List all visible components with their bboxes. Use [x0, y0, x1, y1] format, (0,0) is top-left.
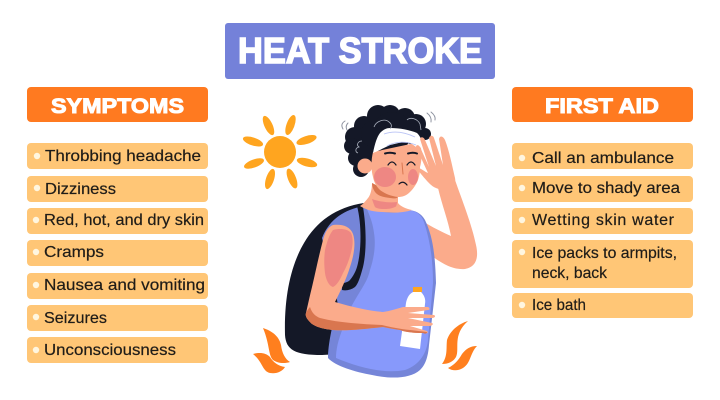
item: throbbing headache: Throbbing headache [45, 148, 201, 165]
raised arm [424, 180, 477, 269]
eyes and brows [385, 153, 417, 185]
heading: first aid [512, 87, 693, 122]
hand on forehead [416, 136, 455, 189]
backpack strap [342, 206, 366, 290]
item: ice bath [512, 293, 693, 318]
item: cramps: Cramps [44, 244, 104, 261]
item: call an ambulance [512, 143, 693, 169]
title [225, 23, 495, 79]
panel: symptoms [27, 87, 208, 363]
panel: first aid [512, 87, 693, 318]
item: nausea and vomiting: Nausea and vomiting [44, 277, 205, 294]
icon: sun [242, 114, 318, 190]
sunburn on upper arm [324, 229, 353, 287]
item: ice bath: Ice bath [532, 297, 586, 314]
item: move to shady area: Move to shady area [532, 180, 680, 197]
heading: symptoms [27, 87, 208, 122]
face [358, 142, 422, 197]
icon: left flames [253, 328, 290, 373]
item: unconsciousness [27, 337, 208, 363]
curl highlights [356, 118, 421, 153]
icon: right flames [442, 321, 477, 370]
illustration: person with backpack [285, 105, 477, 378]
item: ice packs: Ice packs to armpits, [532, 245, 677, 262]
item: red, hot, and dry skin [27, 208, 208, 234]
heading: first aid: FIRST AID [545, 95, 659, 118]
lower arm and hand [306, 225, 435, 334]
item: seizures [27, 305, 208, 331]
item: throbbing headache [27, 143, 208, 169]
item: dizziness: Dizziness [45, 181, 116, 198]
item: cramps [27, 240, 208, 266]
backpack [285, 203, 368, 355]
item: call an ambulance: Call an ambulance [532, 150, 674, 167]
item: unconsciousness: Unconsciousness [44, 342, 176, 359]
item: dizziness [27, 176, 208, 202]
motion lines [342, 112, 435, 130]
item: seizures: Seizures [44, 310, 107, 327]
item: nausea and vomiting [27, 273, 208, 299]
sunburn on neck [372, 199, 397, 209]
item: ice packs [512, 240, 693, 288]
water bottle [400, 287, 425, 349]
hair [344, 105, 431, 177]
cheeks [374, 167, 396, 187]
heading: symptoms: SYMPTOMS [51, 95, 184, 118]
item: wetting skin water: Wetting skin water [532, 212, 675, 229]
item: move to shady area [512, 176, 693, 202]
shirt [322, 206, 436, 378]
item: wetting skin water [512, 208, 693, 234]
item: red, hot, and dry skin: Red, hot, and dry skin [44, 212, 204, 229]
headband [373, 128, 422, 153]
neck [360, 183, 412, 213]
title: HEAT STROKE [238, 30, 482, 71]
item: ice packs: neck, back [532, 265, 608, 282]
